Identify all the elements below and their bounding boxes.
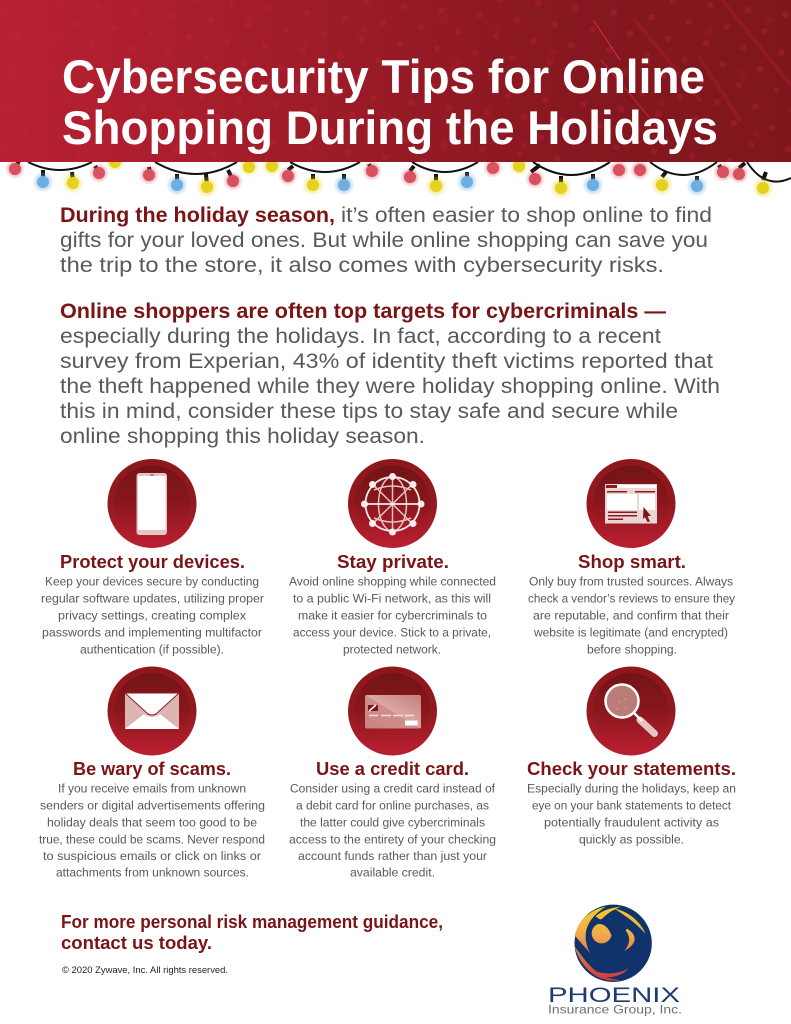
- description: privacy settings, creating complex: [58, 608, 246, 622]
- description: Especially during the holidays, keep an: [527, 782, 736, 796]
- string of holiday lights: [5, 152, 791, 199]
- heading: Shop smart.: [578, 552, 686, 572]
- intro paragraph: [60, 203, 712, 277]
- description: a debit card for online purchases, as: [296, 798, 489, 812]
- icon: smartphone: [108, 459, 196, 548]
- description: regular software updates, utilizing proper: [41, 592, 264, 606]
- description: check a vendor’s reviews to ensure they: [528, 592, 736, 606]
- second paragraph: the theft happened while they were holiday shopping online. With: [60, 374, 720, 398]
- description: true, these could be scams. Never respond: [39, 832, 265, 846]
- tip: protect your devices: [41, 459, 264, 656]
- description: potentially fraudulent activity as: [544, 816, 719, 830]
- description: senders or digital advertisements offering: [40, 798, 265, 812]
- description: protected network.: [343, 642, 441, 656]
- heading: Check your statements.: [527, 759, 736, 779]
- description: [289, 574, 496, 656]
- intro paragraph: gifts for your loved ones. But while online shopping can save you: [60, 228, 708, 252]
- description: make it easier for cybercriminals to: [298, 608, 487, 622]
- call to action: For more personal risk management guidance,: [61, 912, 443, 932]
- second paragraph: especially during the holidays. In fact, according to a recent: [60, 324, 661, 348]
- description: authentication (if possible).: [80, 642, 224, 656]
- heading: Use a credit card.: [316, 759, 469, 779]
- description: If you receive emails from unknown: [58, 782, 246, 796]
- tip: use a credit card: [289, 666, 496, 880]
- description: available credit.: [350, 866, 435, 880]
- heading: Stay private.: [337, 552, 449, 572]
- description: [41, 574, 264, 656]
- title: [62, 50, 718, 154]
- tip: be wary of scams: [39, 666, 265, 880]
- call to action: contact us today.: [61, 933, 212, 953]
- call to action: [61, 912, 443, 953]
- icon: envelope: [108, 666, 196, 756]
- title: Cybersecurity Tips for Online: [62, 50, 705, 103]
- description: holiday deals that seem too good to be: [47, 816, 257, 830]
- logo wordmark: PHOENIX: [548, 984, 680, 1007]
- heading: Be wary of scams.: [73, 759, 231, 779]
- second paragraph: survey from Experian, 43% of identity theft victims reported that: [60, 349, 713, 373]
- description: access to the entirety of your checking: [289, 832, 496, 846]
- description: [528, 574, 736, 656]
- description: [289, 782, 496, 880]
- description: account funds rather than just your: [298, 849, 487, 863]
- heading: Protect your devices.: [60, 552, 245, 572]
- logo tagline: Insurance Group, Inc.: [548, 1004, 682, 1016]
- second paragraph: Online shoppers are often top targets for cybercriminals —: [60, 299, 666, 323]
- tip: stay private: [289, 459, 496, 656]
- second paragraph: this in mind, consider these tips to stay safe and secure while: [60, 399, 678, 423]
- intro paragraph: it’s often easier to shop online to find: [341, 203, 712, 227]
- description: [39, 782, 265, 880]
- description: Keep your devices secure by conducting: [45, 574, 259, 588]
- icon: globe network: [348, 459, 437, 548]
- icon: credit card: [348, 666, 437, 756]
- description: Only buy from trusted sources. Always: [529, 574, 733, 588]
- intro paragraph: During the holiday season,: [60, 203, 335, 227]
- description: Avoid online shopping while connected: [289, 574, 496, 588]
- description: the latter could give cybercriminals: [300, 816, 485, 830]
- second paragraph: online shopping this holiday season.: [60, 424, 425, 448]
- icon: magnifying glass: [586, 666, 676, 756]
- tip: shop smart: [528, 459, 736, 656]
- title: Shopping During the Holidays: [62, 101, 718, 154]
- description: to suspicious emails or click on links or: [43, 849, 261, 863]
- logo: Phoenix Insurance Group: [548, 905, 682, 1016]
- description: website is legitimate (and encrypted): [533, 626, 728, 640]
- intro paragraph: the trip to the store, it also comes with cybersecurity risks.: [60, 253, 664, 277]
- icon: browser window with cursor: [586, 459, 676, 548]
- description: passwords and implementing multifactor: [42, 626, 262, 640]
- description: access your device. Stick to a private,: [293, 626, 491, 640]
- copyright: © 2020 Zywave, Inc. All rights reserved.: [62, 965, 228, 976]
- description: before shopping.: [587, 642, 677, 656]
- description: attachments from unknown sources.: [56, 866, 249, 880]
- header banner: [0, 0, 791, 162]
- description: to a public Wi-Fi network, as this will: [293, 592, 491, 606]
- tip: check your statements: [527, 666, 736, 846]
- second paragraph: [60, 299, 720, 448]
- description: are reputable, and confirm that their: [533, 608, 729, 622]
- description: quickly as possible.: [579, 832, 684, 846]
- description: Consider using a credit card instead of: [290, 782, 496, 796]
- description: eye on your bank statements to detect: [532, 798, 732, 812]
- description: [527, 782, 736, 846]
- logo emblem: [574, 905, 652, 982]
